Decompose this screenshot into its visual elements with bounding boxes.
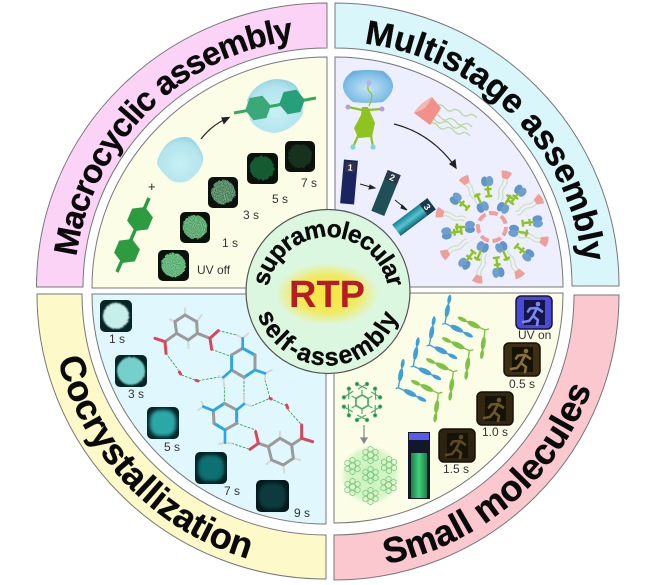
band title: Macrocyclic assembly: Macrocyclic assembly bbox=[54, 20, 291, 255]
icon: hexagonal monomer bbox=[342, 382, 382, 422]
label: 3 s: 3 s bbox=[128, 387, 144, 401]
photo: 3 s bbox=[115, 355, 147, 387]
chart: hydrogen-bonded molecular structure bbox=[155, 308, 313, 473]
plus sign: + bbox=[148, 179, 156, 194]
icon: cuvette 3: 3 bbox=[422, 202, 433, 212]
arrow: cuvette 1 to 2 bbox=[360, 184, 375, 189]
label: 5 s: 5 s bbox=[164, 440, 180, 454]
icon: pink cone with chains bbox=[414, 97, 477, 136]
photo: UV off bbox=[158, 250, 189, 281]
arrow: monomer to assembly bbox=[361, 425, 367, 443]
title: RTP: RTP bbox=[289, 274, 365, 316]
photo: 9 s bbox=[256, 480, 289, 512]
icon: cuvette 1: 1 bbox=[347, 162, 353, 173]
band: multistage assembly bbox=[334, 2, 620, 286]
panel: cocrystallization bbox=[92, 294, 326, 524]
label: 0.5 s: 0.5 s bbox=[509, 377, 535, 391]
arrow: cuvette 2 to 3 bbox=[395, 200, 407, 210]
label: 9 s: 9 s bbox=[294, 506, 310, 520]
icon: exit sign 0.5 s bbox=[504, 343, 540, 376]
icon: macrocycle host bbox=[157, 137, 203, 182]
label: 1 s: 1 s bbox=[222, 236, 238, 250]
center circle: RTP hub bbox=[245, 208, 411, 374]
icon: exit sign 1.5 s bbox=[439, 429, 475, 462]
text: self-assembly: self-assembly bbox=[258, 310, 399, 366]
photo: 7 s bbox=[285, 141, 315, 172]
panel: macrocyclic assembly bbox=[92, 57, 327, 288]
icon: cuvette 1 bbox=[340, 159, 358, 205]
chart: micelle assembly bbox=[435, 170, 549, 284]
arrow: to micelle bbox=[394, 124, 456, 168]
icon: exit sign 1.0 s bbox=[477, 392, 513, 425]
band: macrocyclic assembly bbox=[36, 2, 328, 288]
band title: Small molecules: Small molecules bbox=[384, 384, 590, 562]
arrow: assembly bbox=[201, 118, 229, 139]
photo: 5 s bbox=[247, 153, 278, 184]
icon: cuvette with green emission bbox=[408, 432, 430, 499]
label: 1 s: 1 s bbox=[109, 332, 125, 346]
icon: glowing hexagonal assembly bbox=[340, 445, 400, 505]
label: 7 s: 7 s bbox=[224, 484, 240, 498]
photo: 3 s bbox=[208, 177, 238, 208]
icon: cuvette 3 bbox=[392, 198, 436, 236]
label: 3 s: 3 s bbox=[243, 208, 259, 222]
panel: multistage assembly bbox=[335, 57, 563, 287]
label: UV off: UV off bbox=[197, 263, 231, 277]
band title: Multistage assembly: Multistage assembly bbox=[366, 20, 604, 260]
icon: cuvette 2 bbox=[371, 170, 401, 216]
label: 1.0 s: 1.0 s bbox=[482, 425, 508, 439]
band: small molecules bbox=[334, 294, 620, 580]
band title: Cocrystallization: Cocrystallization bbox=[60, 356, 250, 558]
label: 5 s: 5 s bbox=[272, 192, 288, 206]
icon: exit sign UV on bbox=[516, 296, 552, 329]
text: supramolecular: supramolecular bbox=[256, 221, 402, 285]
label: UV on: UV on bbox=[518, 328, 551, 342]
icon: guest molecule bbox=[112, 198, 155, 272]
icon: capsule with green guest bbox=[343, 70, 393, 150]
band: cocrystallization bbox=[36, 294, 326, 580]
photo: 5 s bbox=[147, 407, 179, 439]
icon: host-guest complex bbox=[234, 79, 316, 133]
panel: small molecules bbox=[334, 293, 563, 523]
photo: 1 s bbox=[100, 300, 132, 332]
label: 1.5 s: 1.5 s bbox=[443, 462, 469, 476]
photo: 7 s bbox=[195, 452, 227, 484]
chart: stacked Y-shaped molecules bbox=[396, 294, 489, 423]
icon: cuvette 2: 2 bbox=[388, 172, 396, 183]
label: 7 s: 7 s bbox=[301, 176, 317, 190]
photo: 1 s bbox=[180, 212, 210, 243]
